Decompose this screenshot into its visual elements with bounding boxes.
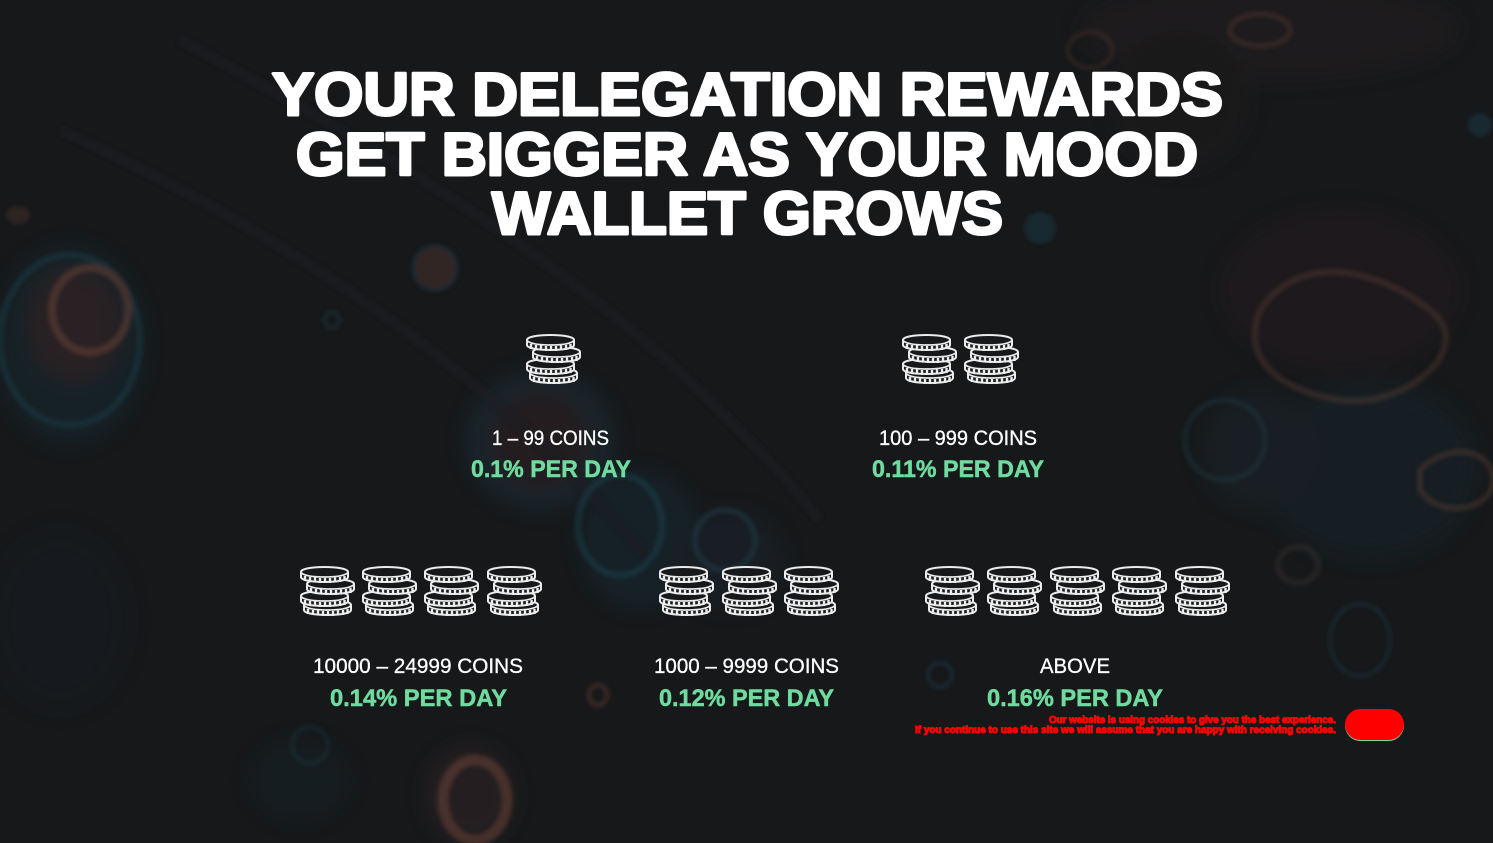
tier label: ABOVE: [1040, 655, 1110, 678]
tier: above: [926, 567, 1229, 712]
tier label: 10000 – 24999 COINS: [313, 655, 523, 678]
reward rate: 0.12% PER DAY: [659, 685, 834, 712]
reward rate: 0.14% PER DAY: [330, 685, 507, 712]
title: WALLET GROWS: [492, 180, 1003, 247]
title: [272, 61, 1223, 247]
reward rate: 0.11% PER DAY: [872, 456, 1044, 483]
cookie notice text: [915, 715, 1336, 736]
tier label: 1 – 99 COINS: [492, 427, 609, 450]
cookie notice text: Our website is using cookies to give you the best experience.: [1049, 715, 1336, 726]
tier: 100 - 999 coins: [872, 335, 1044, 483]
tier label: 100 – 999 COINS: [879, 427, 1037, 450]
icon: coin stack: [527, 335, 580, 384]
tier label: 1000 – 9999 COINS: [654, 655, 839, 678]
tier: 1 - 99 coins: [471, 335, 631, 483]
reward rate: 0.16% PER DAY: [987, 685, 1163, 712]
tier: 10000 - 24999 coins: [301, 567, 541, 712]
tier: 1000 - 9999 coins: [654, 567, 839, 712]
icon: five coin stacks: [926, 567, 1229, 616]
cookie notice text: If you continue to use this site we will assume that you are happy with receiving cookies.: [915, 725, 1336, 736]
title: GET BIGGER AS YOUR MOOD: [296, 121, 1198, 188]
icon: four coin stacks: [301, 567, 541, 616]
reward rate: 0.1% PER DAY: [471, 456, 631, 483]
cookie accept button: [1345, 709, 1404, 741]
icon: three coin stacks: [660, 567, 838, 616]
icon: two coin stacks: [903, 335, 1018, 384]
title: YOUR DELEGATION REWARDS: [272, 61, 1223, 128]
